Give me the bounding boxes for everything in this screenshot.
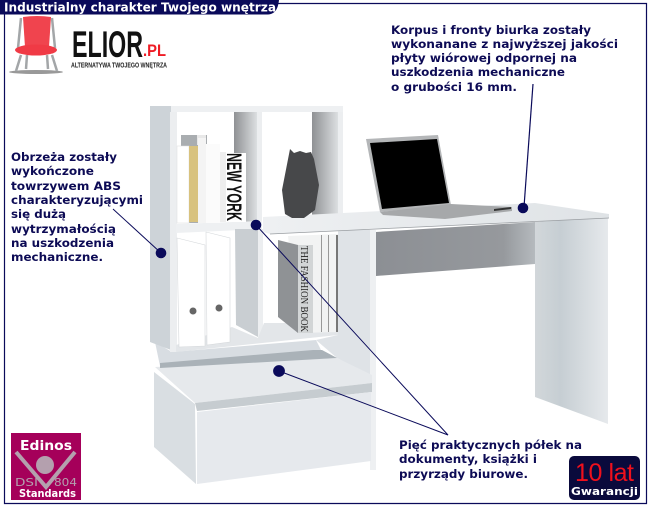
text: desk body description: uszkodzenia mechaniczne xyxy=(391,65,565,79)
shelf unit upper xyxy=(150,106,343,352)
desk leg and back panel xyxy=(376,217,608,424)
title banner: Industrialny charakter Twojego wnętrza xyxy=(4,0,276,14)
text: edges description: wykończone xyxy=(11,164,94,178)
text: desk body description: Korpus i fronty biurka zostały xyxy=(391,23,592,37)
callout: edges xyxy=(11,150,166,264)
binders xyxy=(177,232,230,347)
desktop surface xyxy=(263,203,609,234)
laptop xyxy=(366,135,512,219)
text: shelves description: dokumenty, książki i xyxy=(399,452,537,466)
pointer: desk body xyxy=(518,84,533,213)
icon: red chair xyxy=(9,16,63,74)
shelf unit right support xyxy=(316,230,370,376)
text: edges description xyxy=(11,150,143,264)
logo: Elior xyxy=(9,16,167,74)
logo tagline: ALTERNATYWA TWOJEGO WNĘTRZA xyxy=(71,62,167,70)
callout: desk body xyxy=(391,23,618,213)
pointer: edges xyxy=(113,209,166,258)
books, lower shelf: THE FASHION BOOK xyxy=(298,246,310,332)
text: edges description: charakteryzującymi xyxy=(11,193,143,207)
text: desk body description xyxy=(391,23,618,94)
drawer side panel xyxy=(154,372,196,484)
drawer front xyxy=(197,392,371,484)
lower niche back xyxy=(155,340,322,366)
vase xyxy=(282,149,319,218)
logo suffix: .PL xyxy=(143,41,166,60)
drawer rail xyxy=(195,383,372,411)
text: edges description: mechaniczne. xyxy=(11,250,103,264)
text: desk body description: o grubości 16 mm. xyxy=(391,80,517,94)
text: shelves description: Pięć praktycznych półek na xyxy=(399,438,582,452)
text: edges description: się dużą xyxy=(11,207,66,221)
badge: Edinos DSI 804 Standards: 804 xyxy=(54,476,77,489)
badge: 10 lat warranty: 10 lat xyxy=(575,459,634,487)
books, lower shelf xyxy=(278,234,338,333)
text: desk body description: płyty wiórowej odpornej na xyxy=(391,51,577,65)
text: edges description: Obrzeża zostały xyxy=(11,150,118,164)
furniture: desk with shelving xyxy=(150,106,609,484)
text: edges description: na uszkodzenia xyxy=(11,236,114,250)
text: edges description: towrzywem ABS xyxy=(11,179,121,193)
badge: Edinos DSI 804 Standards: DSI xyxy=(15,476,38,489)
books, upper shelf xyxy=(177,135,246,223)
text: edges description: wytrzymałością xyxy=(11,222,116,236)
text: shelves description xyxy=(399,438,582,481)
badge: 10 lat warranty: Gwarancji xyxy=(571,486,638,498)
lower shelf top xyxy=(155,350,372,403)
books, upper shelf: NEW YORK xyxy=(222,153,245,221)
logo wordmark: ELIOR xyxy=(72,24,143,65)
badge: 10 lat warranty xyxy=(569,456,640,500)
text: shelves description: przyrządy biurowe. xyxy=(399,467,528,481)
pointers: shelves xyxy=(251,220,448,435)
badge: Edinos DSI 804 Standards: Standards xyxy=(19,488,76,500)
badge: Edinos DSI 804 Standards: Edinos xyxy=(20,439,72,454)
callout: shelves xyxy=(251,220,582,481)
badge: Edinos DSI 804 Standards xyxy=(11,433,81,500)
text: desk body description: wykonanane z najwyższej jakości xyxy=(391,37,618,51)
